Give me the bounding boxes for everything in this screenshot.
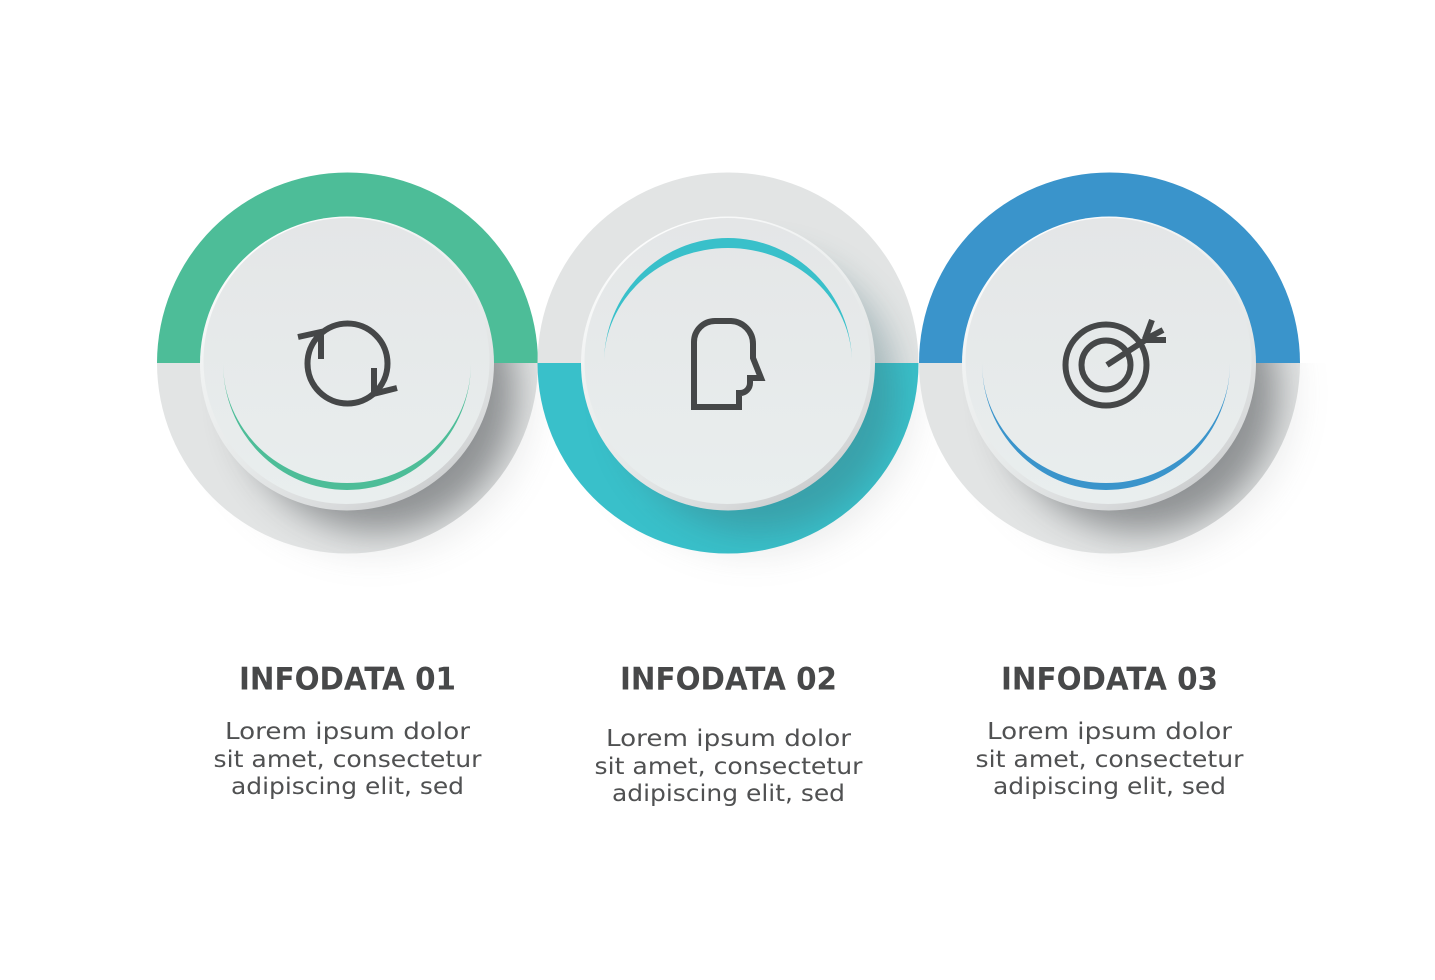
accent crescent: blue xyxy=(982,363,1230,490)
text block: step 1 description: sit amet, consectetur xyxy=(214,745,482,773)
panel: step 2 circle xyxy=(538,173,918,558)
outer ring: grey lower half xyxy=(157,363,538,554)
text block: step 2 description: adipiscing elit, sed xyxy=(612,779,845,807)
accent crescent: teal xyxy=(604,238,852,363)
accent crescent: green xyxy=(223,363,471,490)
icon: target with arrow xyxy=(1066,320,1166,406)
text block: step 3 description xyxy=(976,717,1244,800)
icon: cycle arrows xyxy=(298,324,397,404)
text block: step 1 description: adipiscing elit, sed xyxy=(231,772,464,800)
outer ring: green upper half xyxy=(157,173,538,363)
outer ring: blue upper half xyxy=(919,173,1300,363)
text block: step 1 description: Lorem ipsum dolor xyxy=(225,717,470,745)
text block: step 1 description xyxy=(214,717,482,800)
outer ring: grey upper half xyxy=(538,173,918,363)
heading: infodata 02: INFODATA 02 xyxy=(620,662,837,698)
outer ring: grey lower half xyxy=(919,363,1300,554)
icon: head profile xyxy=(694,321,761,407)
text block: step 2 description: Lorem ipsum dolor xyxy=(606,724,851,752)
heading: infodata 03: INFODATA 03 xyxy=(1001,662,1218,698)
text block: step 3 description: Lorem ipsum dolor xyxy=(987,717,1232,745)
outer ring: teal lower half xyxy=(538,363,918,554)
text block: step 2 description xyxy=(594,724,863,807)
text block: step 3 description: sit amet, consectetur xyxy=(976,745,1244,773)
text block: step 2 description: sit amet, consectetur xyxy=(594,752,863,780)
panel: step 3 circle xyxy=(919,173,1300,558)
text block: step 3 description: adipiscing elit, sed xyxy=(993,772,1226,800)
panel: step 1 circle xyxy=(157,173,538,558)
heading: infodata 01: INFODATA 01 xyxy=(239,662,456,698)
